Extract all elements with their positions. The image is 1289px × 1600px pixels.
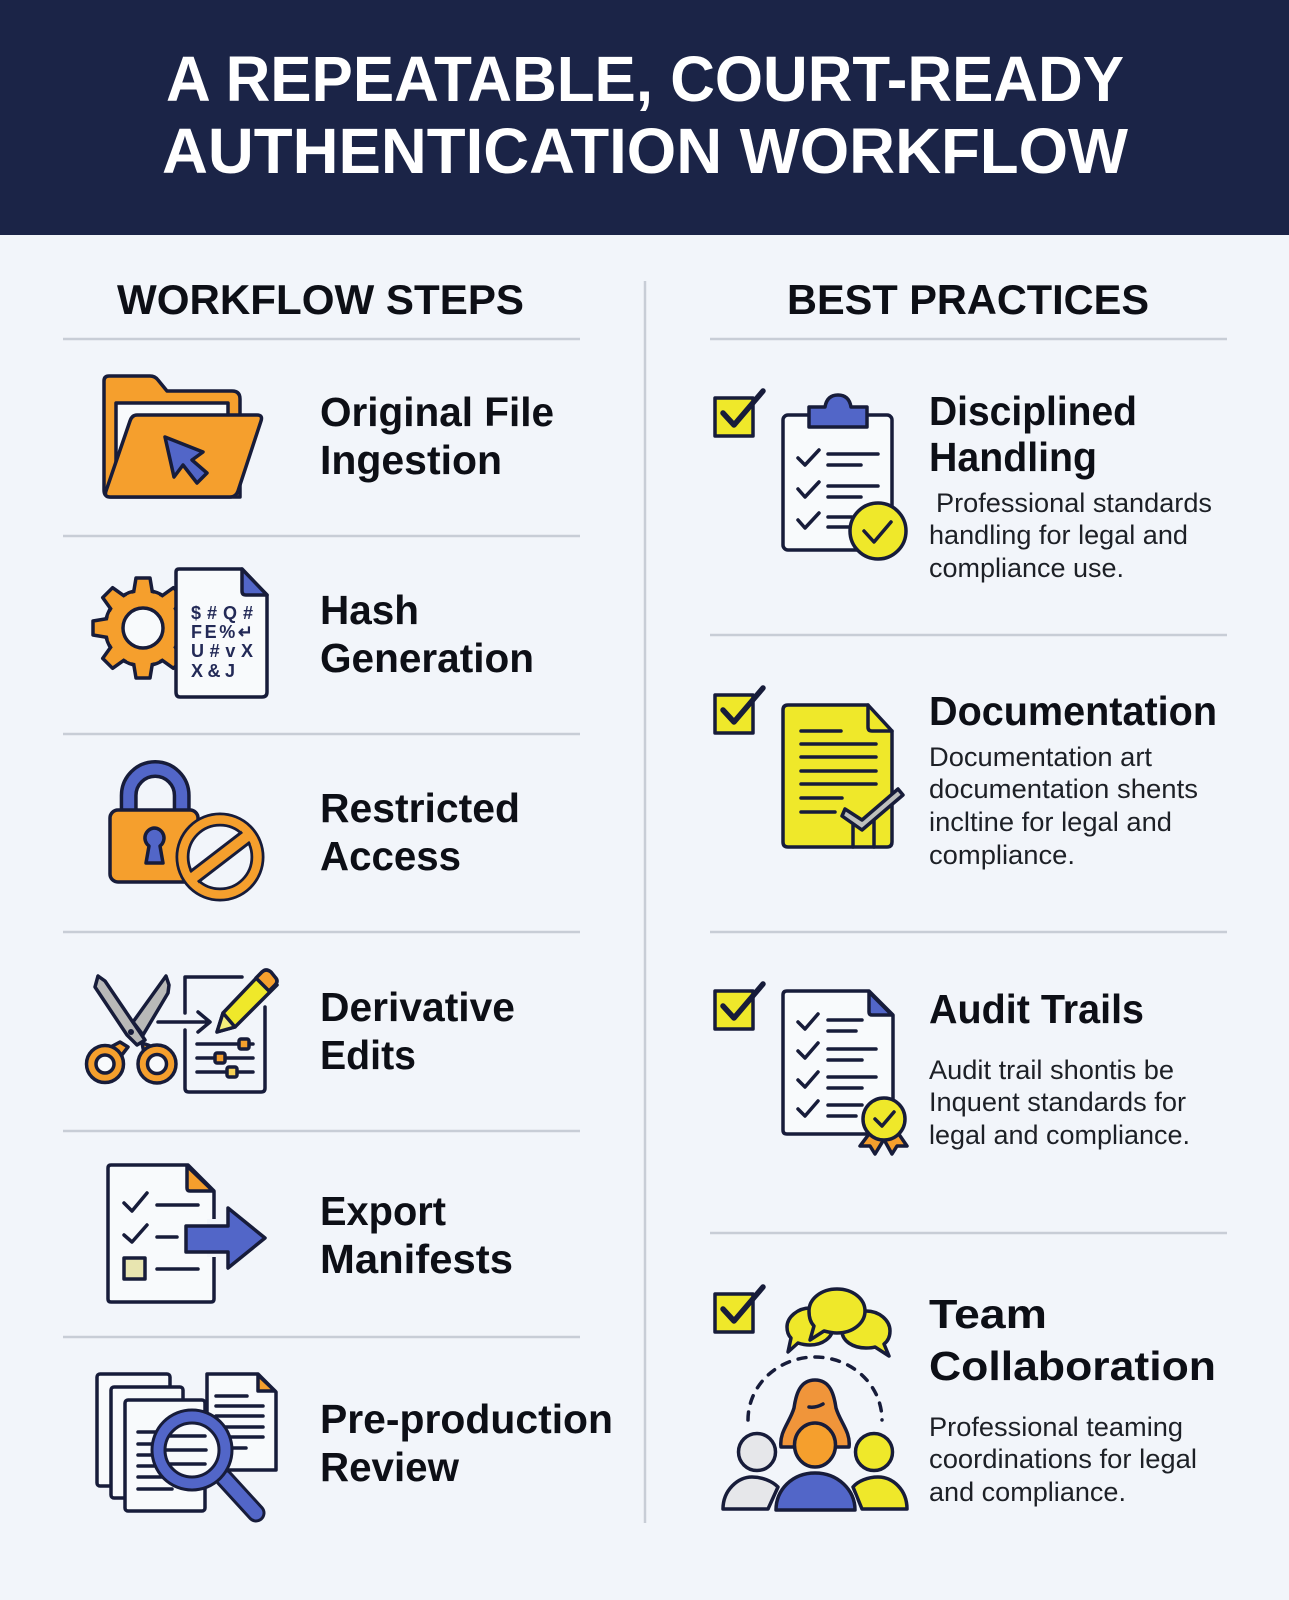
text: disciplined handling: Disciplined <box>929 388 1137 434</box>
icon: gear and hash document: X&J <box>191 661 235 681</box>
icon: padlock with no-entry sign <box>110 769 258 894</box>
text: documentation: compliance. <box>929 840 1075 870</box>
icon: export manifest with arrow <box>108 1165 265 1302</box>
header banner with title: A REPEATABLE, COURT-READY <box>166 43 1124 115</box>
label: pre-production review <box>320 1396 613 1490</box>
label: original file ingestion: Original File <box>320 389 554 435</box>
icon: yellow document with check <box>783 705 903 847</box>
label: restricted access: Access <box>320 833 461 879</box>
icon: scissors and edited document <box>86 970 277 1092</box>
icon: folder with cursor <box>104 376 262 497</box>
text: team collaboration <box>929 1291 1216 1507</box>
text: disciplined handling: handling for legal and <box>929 520 1188 550</box>
text: team collaboration: coordinations for legal <box>929 1444 1197 1474</box>
text: audit trails: Audit Trails <box>929 986 1144 1032</box>
label: derivative edits: Derivative <box>320 984 515 1030</box>
header banner with title: AUTHENTICATION WORKFLOW <box>162 115 1129 187</box>
label: derivative edits: Edits <box>320 1032 416 1078</box>
label: hash generation: Hash <box>320 587 419 633</box>
label: hash generation: Generation <box>320 635 534 681</box>
icon: checkbox 2 <box>715 688 763 733</box>
label: original file ingestion <box>320 389 554 483</box>
icon: team collaboration <box>723 1289 907 1511</box>
icon: clipboard with check <box>783 395 906 559</box>
text: documentation: incltine for legal and <box>929 807 1172 837</box>
label: derivative edits <box>320 984 515 1078</box>
label: export manifests <box>320 1188 513 1282</box>
heading: workflow steps: WORKFLOW STEPS <box>117 276 524 323</box>
icon: checkbox 3 <box>715 984 763 1029</box>
text: team collaboration: Professional teaming <box>929 1412 1183 1442</box>
icon: document stack with magnifier <box>97 1374 276 1513</box>
icon: checkbox 4 <box>715 1287 763 1332</box>
label: restricted access: Restricted <box>320 785 520 831</box>
text: team collaboration: and compliance. <box>929 1477 1126 1507</box>
text: documentation: Documentation art <box>929 742 1152 772</box>
panel: workflow steps <box>63 276 613 1513</box>
text: team collaboration: Team <box>929 1291 1047 1337</box>
label: pre-production review: Pre-production <box>320 1396 613 1442</box>
text: audit trails: legal and compliance. <box>929 1120 1190 1150</box>
label: export manifests: Export <box>320 1188 446 1234</box>
icon: gear and hash document <box>93 569 267 697</box>
icon: gear and hash document: U#vX <box>191 641 253 661</box>
label: hash generation <box>320 587 534 681</box>
label: pre-production review: Review <box>320 1444 459 1490</box>
text: disciplined handling: Handling <box>929 434 1097 480</box>
text: disciplined handling: compliance use. <box>929 553 1124 583</box>
label: export manifests: Manifests <box>320 1236 513 1282</box>
text: documentation: documentation shents <box>929 774 1198 804</box>
text: disciplined handling <box>929 388 1212 583</box>
label: original file ingestion: Ingestion <box>320 437 502 483</box>
icon: audit checklist with badge <box>783 991 907 1154</box>
icon: checkbox 1 <box>715 391 763 436</box>
label: restricted access <box>320 785 520 879</box>
text: documentation: Documentation <box>929 688 1217 734</box>
text: audit trails: Inquent standards for <box>929 1087 1186 1117</box>
text: disciplined handling: Professional standards <box>936 488 1212 518</box>
icon: gear and hash document: $#Q# <box>191 603 253 623</box>
text: team collaboration: Collaboration <box>929 1343 1216 1389</box>
text: audit trails <box>929 986 1190 1150</box>
text: audit trails: Audit trail shontis be <box>929 1055 1174 1085</box>
text: documentation <box>929 688 1217 870</box>
icon: gear and hash document: FE%↵ <box>191 622 253 642</box>
heading: best practices: BEST PRACTICES <box>787 276 1149 323</box>
panel: best practices <box>710 276 1227 1511</box>
header banner with title <box>0 0 1289 235</box>
